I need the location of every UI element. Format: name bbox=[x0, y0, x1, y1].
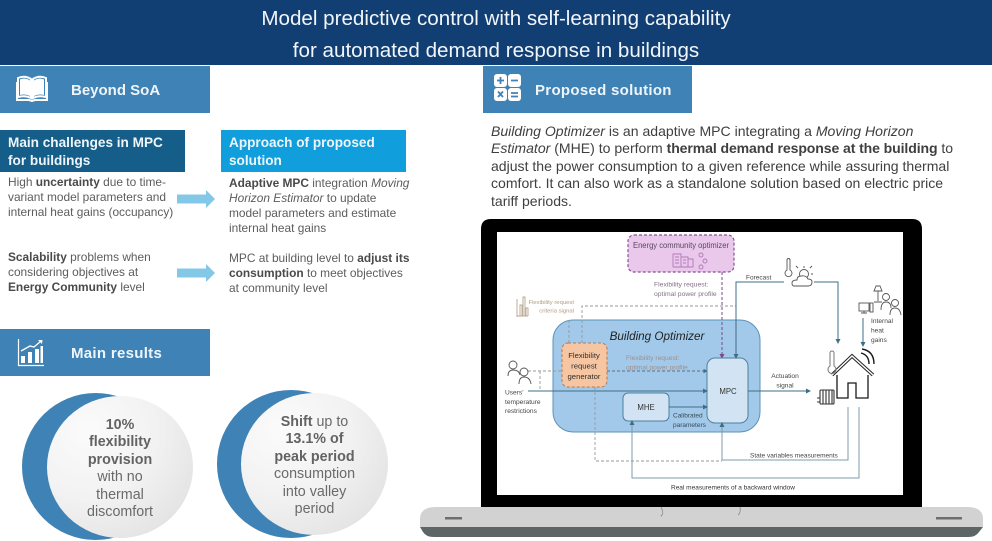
result circle: with no bbox=[97, 469, 143, 485]
heading: main challenges bbox=[0, 130, 185, 172]
challenge text: scalability bbox=[8, 250, 151, 294]
result circle: 13.1% of bbox=[285, 431, 344, 447]
arrow: actuation signal: Actuation bbox=[771, 373, 799, 380]
label: flexibility request optimal power profile (top): Flexibility request: bbox=[654, 282, 709, 288]
icon: weather bbox=[785, 258, 813, 286]
result circle: Shift up to bbox=[281, 414, 348, 430]
label: calibrated parameters bbox=[673, 412, 707, 429]
label: calibrated parameters: parameters bbox=[673, 422, 707, 429]
solution description: tariff periods. bbox=[491, 193, 572, 209]
label: users' temperature restrictions: temperature bbox=[505, 399, 541, 406]
solution description: Building Optimizer is an adaptive MPC integrating a Moving Horizon bbox=[491, 123, 913, 139]
laptop base bbox=[420, 507, 983, 537]
arrow: users to MPC bbox=[528, 390, 707, 392]
approach text: adaptive MPC: Adaptive MPC integration Moving bbox=[229, 176, 409, 190]
icon: users bbox=[508, 361, 531, 384]
challenge text: scalability: Scalability problems when bbox=[8, 250, 151, 264]
icon and label: flexibility criteria signal bbox=[517, 297, 574, 317]
solution description bbox=[491, 123, 953, 209]
label: flexibility request optimal power profile (top) bbox=[654, 282, 717, 298]
icon: occupants and devices bbox=[859, 286, 901, 315]
label: flexibility request inside optimizer: optimal power profile bbox=[626, 364, 688, 372]
box: MPC: MPC bbox=[719, 387, 737, 396]
crescent backdrop bbox=[22, 393, 169, 540]
box: MHE bbox=[623, 393, 669, 421]
arrow: real measurements bbox=[632, 407, 859, 492]
arrow: forecast: Forecast bbox=[746, 274, 771, 282]
section header: Proposed solution: Proposed solution bbox=[535, 82, 672, 98]
arrow: scalability to building-level MPC bbox=[177, 264, 215, 282]
icon: open book bbox=[16, 76, 48, 102]
result circle: consumption bbox=[274, 466, 355, 482]
box: MHE: MHE bbox=[637, 403, 655, 412]
title banner: for automated demand response in buildings bbox=[293, 39, 699, 62]
dashed connectors bbox=[528, 306, 736, 461]
panel: energy community optimizer: Energy community optimizer bbox=[633, 240, 729, 250]
icon: radiator bbox=[817, 390, 834, 404]
approach text: adaptive MPC bbox=[229, 176, 410, 234]
icon and label: flexibility criteria signal: Flexibility request bbox=[528, 300, 574, 306]
section header: Proposed solution bbox=[483, 66, 692, 113]
arrow: internal heat gains: heat bbox=[871, 328, 884, 334]
section header: Main results bbox=[0, 329, 210, 376]
panel: Building Optimizer bbox=[553, 320, 760, 432]
result: 13.1% shift crescent bbox=[217, 390, 388, 538]
arrow: actuation signal bbox=[748, 373, 810, 391]
laptop screen frame bbox=[481, 219, 922, 507]
arrow: MHE to MPC bbox=[669, 406, 707, 408]
label: flexibility request optimal power profile (top): optimal power profile bbox=[654, 291, 717, 298]
result circle: flexibility bbox=[89, 434, 151, 450]
icon: bar chart bbox=[18, 339, 44, 366]
arrow: internal heat gains: gains bbox=[871, 337, 887, 344]
result: 10% flexibility crescent bbox=[22, 393, 193, 540]
box: flexibility request generator: Flexibility bbox=[568, 351, 600, 360]
result circle: discomfort bbox=[87, 504, 153, 520]
result circle: provision bbox=[88, 452, 152, 468]
result circle bbox=[47, 396, 193, 538]
panel: Building Optimizer: Building Optimizer bbox=[610, 330, 706, 343]
challenge text: uncertainty: internal heat gains (occupancy) bbox=[8, 204, 173, 218]
result circle: period bbox=[295, 501, 334, 517]
label: users' temperature restrictions bbox=[505, 390, 541, 415]
box: flexibility request generator: request bbox=[571, 362, 598, 370]
result circle: into valley bbox=[283, 484, 346, 500]
box: MPC bbox=[707, 358, 748, 423]
arrow: actuation signal: signal bbox=[776, 382, 794, 390]
approach text: building level: at community level bbox=[229, 280, 327, 294]
result circle: thermal bbox=[96, 487, 144, 503]
result circle: 10% bbox=[106, 417, 134, 433]
heading: main challenges: Main challenges in MPC bbox=[8, 135, 163, 150]
label: flexibility request inside optimizer: Flexibility request: bbox=[626, 355, 680, 362]
arrow: real measurements: Real measurements of a backward window bbox=[671, 484, 795, 492]
icon: city with network bbox=[673, 253, 707, 269]
icon and label: flexibility criteria signal: criteria signal bbox=[539, 308, 574, 314]
panel: energy community optimizer bbox=[628, 235, 734, 272]
icon: smart house bbox=[828, 349, 874, 398]
arrow: internal heat gains bbox=[863, 318, 894, 346]
heading: approach of proposed solution bbox=[221, 130, 406, 172]
solution description: Estimator (MHE) to perform thermal demand response at the building to bbox=[491, 140, 953, 156]
screen bbox=[497, 232, 903, 495]
heading: approach of proposed solution: Approach of proposed bbox=[229, 135, 375, 150]
challenge text: scalability: Energy Community level bbox=[8, 280, 145, 294]
heading: approach of proposed solution: solution bbox=[229, 152, 282, 168]
crescent backdrop bbox=[217, 390, 365, 538]
arrow: state variables bbox=[722, 407, 848, 460]
arrow: state variables: State variables measurements bbox=[750, 452, 839, 460]
challenge text: uncertainty: High uncertainty due to time- bbox=[8, 174, 166, 188]
approach text: adaptive MPC: model parameters and estimate bbox=[229, 206, 396, 220]
heading: main challenges: for buildings bbox=[8, 152, 90, 168]
icon: calculator bbox=[494, 74, 521, 101]
section header: Beyond SoA bbox=[0, 66, 210, 113]
label: users' temperature restrictions: Users' bbox=[505, 390, 523, 396]
approach text: building level: MPC at building level to adjust its bbox=[229, 250, 409, 264]
arrow: uncertainty to adaptive MPC bbox=[177, 190, 215, 208]
approach text: adaptive MPC: internal heat gains bbox=[229, 220, 326, 234]
box: flexibility request generator: generator bbox=[568, 372, 601, 381]
dashed arrow: generator to MPC bbox=[607, 370, 707, 372]
challenge text: scalability: considering objectives at bbox=[8, 264, 138, 278]
section header: Beyond SoA: Beyond SoA bbox=[71, 82, 160, 98]
arrow: internal heat gains: Internal bbox=[871, 318, 894, 325]
approach text: building level: consumption to meet objectives bbox=[229, 266, 403, 280]
dashed arrow: energy community to MPC bbox=[721, 272, 723, 358]
approach text: building level bbox=[229, 250, 409, 294]
label: users' temperature restrictions: restrictions bbox=[505, 408, 538, 415]
label: flexibility request inside optimizer bbox=[626, 355, 688, 372]
label: calibrated parameters: Calibrated bbox=[673, 412, 703, 420]
result circle: peak period bbox=[274, 449, 355, 465]
challenge text: uncertainty bbox=[8, 174, 173, 218]
approach text: adaptive MPC: Horizon Estimator to update bbox=[229, 190, 376, 204]
arrow: forecast bbox=[736, 274, 838, 358]
section header: Main results: Main results bbox=[71, 344, 162, 362]
challenge text: uncertainty: variant model parameters and bbox=[8, 190, 166, 204]
solution description: comfort. It can also work as a standalone solution based on electric price bbox=[491, 175, 943, 191]
title banner: Model predictive control with self-learning capability bbox=[261, 6, 731, 30]
solution description: adjust the power consumption to a given reference while assuring thermal bbox=[491, 158, 949, 174]
result circle bbox=[241, 393, 388, 535]
title banner bbox=[0, 0, 992, 65]
box: flexibility request generator bbox=[562, 343, 607, 387]
